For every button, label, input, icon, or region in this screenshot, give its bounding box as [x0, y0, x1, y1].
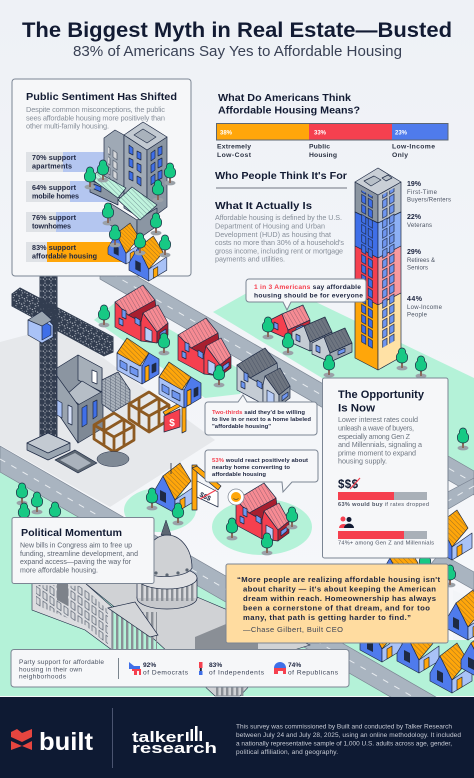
house with for-sale sign [153, 463, 221, 513]
red house with smiley thought bubble [228, 483, 289, 541]
text: methodology: a nationally representative sample of 1,000 U.S. adults across age, gender, [236, 740, 452, 748]
stacked bar: meaning of affordable housing: Extremely [217, 144, 251, 150]
stacked bar: meaning of affordable housing [216, 124, 448, 159]
text: quote [237, 575, 440, 622]
stat: democrats: of Democrats [143, 670, 189, 676]
stat: democrats: 92% [143, 662, 156, 669]
stat: democrats [143, 662, 189, 676]
text: opportunity body: housing supply. [338, 456, 387, 466]
text: definition: Development (HUD) as housing that [215, 230, 331, 239]
stacked bar: meaning of affordable housing: Only [392, 152, 408, 159]
callout: 53%: affordable housing [212, 472, 266, 478]
text: public sentiment body: other multi-family housing. [26, 122, 109, 130]
tower percentage labels: Buyers/Renters [407, 198, 451, 204]
text: opportunity body: prime moment to expand [338, 448, 416, 458]
heading: political momentum: Political Momentum [21, 527, 122, 539]
callout: 1 in 3 Americans: housing should be for everyone [254, 292, 363, 300]
capitol building [32, 520, 310, 696]
text: opportunity body: especially among Gen Z [338, 432, 411, 441]
text: opportunity body [338, 415, 422, 466]
stat: republicans: 74% [288, 662, 301, 669]
bar: 74% Gen Z and Millennials [338, 531, 434, 546]
callout: 53% [205, 450, 318, 492]
concrete building under construction [57, 355, 103, 443]
text: political momentum body: expand access—paving the way for [20, 559, 132, 566]
callout: 53%: 53% would react positively about [212, 458, 308, 464]
text: quote: many, that path is getting harder to find.” [243, 613, 411, 622]
house with for-sale sign: $$$ [198, 492, 212, 503]
text: party support label: Party support for affordable [19, 659, 104, 666]
heading: opportunity: The Opportunity [338, 389, 425, 401]
text: methodology: This survey was commissioned by Built and conducted by Talker Research [236, 724, 452, 730]
icon: housing types illustration [84, 122, 176, 281]
callout: two-thirds: Two-thirds said they'd be willing [212, 410, 305, 416]
text: quote: about charity — it's about keeping the American [243, 584, 436, 594]
excavation pit and rock pile [55, 450, 129, 473]
text: quote: “More people are realizing affordable housing isn't [237, 575, 440, 584]
text: definition: gross income, including rent or mortgage [215, 246, 343, 256]
text: methodology: between July 24 and July 28, 2025, using an online methodology. It included [236, 732, 461, 739]
text: definition: Department of Housing and Urban [215, 222, 325, 230]
heading: who people think it's for: Who People Think It's For [215, 170, 347, 182]
for-sale sign on construction lot: $ [169, 418, 175, 429]
heading: public sentiment: Public Sentiment Has Shifted [26, 91, 177, 103]
icon: independent [199, 662, 202, 675]
stacked bar: meaning of affordable housing: 23% [395, 130, 408, 136]
tower percentage labels: Retirees & [407, 258, 435, 264]
panel: party support [11, 650, 349, 687]
heading: opportunity [338, 389, 425, 414]
gray house [237, 348, 290, 406]
stacked bar: meaning of affordable housing: Low-Cost [217, 152, 252, 159]
text: methodology [236, 724, 461, 756]
stat: independents: of Independents [209, 670, 265, 676]
text: definition: payments and utilities. [215, 254, 285, 264]
bar chart: support by housing type: 83% support [32, 243, 77, 252]
icon: crossed-out dollars: $$$ [338, 479, 359, 491]
text: party support label: neighborhoods [19, 674, 67, 680]
text: attribution: —Chase Gilbert, Built CEO [243, 625, 343, 634]
icon: republican elephant [274, 662, 286, 674]
stat: republicans: of Republicans [288, 670, 339, 676]
tower percentage labels: 22% [407, 214, 422, 221]
text: public sentiment body [26, 105, 165, 130]
logo: built: built [39, 728, 94, 756]
callout: 1 in 3 Americans [246, 279, 366, 310]
bar chart: support by housing type: 76% support [32, 213, 77, 222]
tower percentage labels: 44% [407, 296, 423, 303]
logo: talker research: research [132, 740, 217, 757]
heading: what do Americans think: Affordable Housing Means? [218, 106, 360, 116]
panel: CEO quote [226, 564, 448, 643]
text: political momentum body: more affordable housing. [20, 568, 98, 574]
heading: what it actually is: What It Actually Is [215, 200, 312, 212]
stacked bar: meaning of affordable housing: Low-Income [392, 144, 435, 150]
text: definition [215, 213, 344, 264]
bar chart: support by housing type: 64% support [32, 183, 77, 192]
panel: political momentum [12, 518, 154, 584]
logo: talker research: talker [132, 729, 184, 746]
bar chart: support by housing type: townhomes [32, 222, 71, 230]
bar: 63% would buy [338, 492, 429, 508]
callout: 1 in 3 Americans: 1 in 3 Americans say affordable [254, 284, 361, 291]
stacked bar: meaning of affordable housing: Housing [309, 152, 337, 159]
for-sale sign on construction lot [163, 396, 192, 433]
bar: 74% Gen Z and Millennials: 74%+ among Gen Z and Millennials [338, 540, 434, 546]
heading: what do Americans think: What Do Americans Think [218, 93, 351, 104]
bar: 63% would buy: 63% would buy if rates dropped [338, 502, 429, 508]
tower percentage labels: Seniors [407, 266, 428, 272]
tower percentage labels: 29% [407, 249, 422, 256]
heading: what do Americans think [218, 93, 360, 116]
subtitle: 83% of Americans Say Yes to Affordable Housing [73, 43, 402, 60]
scene: ground, lawns and roads [0, 255, 474, 745]
text: definition: Affordable housing is defined by the U.S. [215, 213, 342, 222]
logo: talker research [132, 726, 217, 757]
heading: opportunity: Is Now [338, 402, 375, 414]
title: The Biggest Myth in Real Estate—Busted [22, 19, 452, 42]
logo: built [11, 728, 94, 756]
panel: public sentiment [12, 79, 191, 281]
text: opportunity body: and Millennials, signaling a [338, 440, 422, 449]
panel-side houses bottom right [360, 510, 474, 693]
blue houses with orange roofs [117, 338, 201, 408]
callout: 53%: nearby home converting to [212, 465, 290, 471]
bar chart: support by housing type: 70% support [32, 153, 77, 162]
text: quote: been a cornerstone of that dream, and for too [243, 604, 430, 612]
text: party support label [19, 659, 104, 680]
callout: two-thirds: "affordable housing" [212, 424, 271, 430]
text: political momentum body [20, 542, 138, 574]
text: opportunity body: Lower interest rates could [338, 415, 418, 424]
tower percentage labels: Veterans [407, 223, 432, 229]
crane [12, 266, 113, 460]
bar chart: support by housing type: mobile homes [32, 192, 79, 200]
stacked bar: meaning of affordable housing: 33% [314, 130, 327, 136]
tower percentage labels: People [407, 312, 428, 318]
tower percentage labels: Low-Income [407, 305, 443, 311]
text: opportunity body: unleash a wave of buyers, [338, 424, 414, 432]
stacked bar: meaning of affordable housing: Public [309, 144, 330, 150]
text: party support label: housing in their own [19, 666, 82, 674]
text: public sentiment body: Despite common misconceptions, the public [26, 105, 165, 114]
stack of building materials [102, 372, 130, 412]
stat: independents [209, 662, 265, 676]
text: public sentiment body: sees affordable housing more positively than [26, 114, 165, 122]
text: political momentum body: New bills in Congress aim to free up [20, 542, 132, 550]
icon: democratic donkey [129, 662, 141, 675]
red houses [115, 285, 231, 376]
tower percentage labels [407, 181, 451, 318]
text: definition: costs no more than 30% of a household's [215, 238, 344, 247]
stat: republicans [288, 662, 339, 676]
bar chart: support by housing type: apartments [32, 162, 72, 170]
footer [0, 697, 474, 778]
stat: independents: 83% [209, 662, 222, 669]
wooden house frames [94, 392, 169, 452]
segmented tower [355, 168, 401, 370]
callout: two-thirds [205, 395, 317, 435]
text: methodology: political affiliation, and geography. [236, 749, 338, 756]
trees [16, 305, 469, 587]
bar chart: support by housing type: affordable housing [32, 252, 97, 260]
panel: the opportunity is now [322, 378, 448, 558]
text: quote: dream within reach. Homeownership has always [243, 594, 436, 603]
bar chart: support by housing type [26, 152, 131, 262]
stacked bar: meaning of affordable housing: 38% [220, 130, 233, 136]
text: political momentum body: funding, streamline development, and [20, 551, 138, 558]
tower percentage labels: 19% [407, 181, 422, 188]
tower percentage labels: First-Time [407, 190, 438, 196]
small house row by the tower [270, 305, 352, 362]
callout: two-thirds: to live in or next to a home labeled [212, 417, 311, 423]
icon: people [339, 516, 354, 528]
